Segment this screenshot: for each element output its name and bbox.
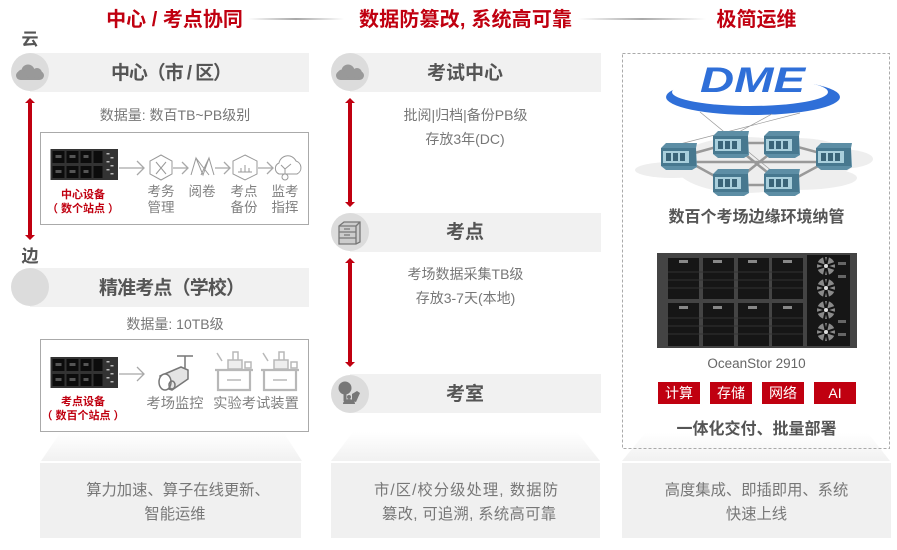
badge: AI: AI <box>828 385 842 401</box>
panel: precise exam site school: 精准考点（学校） <box>99 276 245 299</box>
badge: network <box>762 382 804 404</box>
panel: summary column 3: 快速上线 <box>726 506 787 523</box>
diagram: managed edge network <box>635 112 873 196</box>
panel: summary column 2 <box>331 463 600 538</box>
trapezoid decoration column 3 <box>622 433 890 461</box>
badge: compute: 计算 <box>665 385 693 401</box>
panel: classroom: 考室 <box>446 382 484 405</box>
text: managed edge environments: 数百个考场边缘环境纳管 <box>668 207 845 226</box>
arrow: server to camera <box>119 367 144 381</box>
text: center data volume: 数据量: 数百TB~PB级别 <box>100 107 250 123</box>
text: center equipment label: 中心设备 <box>61 187 105 201</box>
text: exam center details: 存放3年(DC) <box>425 131 505 147</box>
badge: storage <box>710 382 752 404</box>
panel: summary column 1: 智能运维 <box>144 505 206 523</box>
text: exam center details: 批阅|归档|备份PB级 <box>404 107 527 123</box>
title: center and exam site collaboration: 中心 / 考点协同 <box>106 8 243 31</box>
icon: DME logo: DME <box>700 61 807 100</box>
badge: AI <box>814 382 856 404</box>
icon: marking <box>191 158 214 175</box>
panel: exam center <box>331 53 601 92</box>
text: exam center details <box>404 107 527 147</box>
icon: storage cabinet <box>339 222 360 244</box>
text: school data volume: 数据量: 10TB级 <box>126 316 224 332</box>
panel: summary column 3: 高度集成、即插即用、系统 <box>665 482 848 499</box>
icon: lab exam device 2 <box>261 352 299 390</box>
text: monitoring command: 监考 <box>272 184 298 199</box>
badge: compute <box>658 382 700 404</box>
text: exam site equipment label: 考点设备 <box>61 394 105 408</box>
title: tamper proofing and high availability: 数据防篡改, 系统高可靠 <box>359 7 572 31</box>
label: edge: 边 <box>22 247 38 266</box>
text: lab exam device: 实验考试装置 <box>213 395 299 412</box>
panel: dashed simple operations box <box>622 54 890 448</box>
icon: camera and people <box>338 382 360 404</box>
text: exam site details: 存放3-7天(本地) <box>416 290 515 306</box>
panel: exam center: 考试中心 <box>427 62 503 84</box>
icon: exam management <box>150 155 172 180</box>
icon: exam site server <box>50 357 118 388</box>
text: exam site details <box>408 266 523 306</box>
panel: center equipment: 管理 <box>148 200 175 215</box>
text: OceanStor 2910: OceanStor 2910 <box>707 356 806 371</box>
panel: summary column 3 <box>622 463 891 538</box>
panel: summary column 1 <box>40 463 301 538</box>
panel: exam site: 考点 <box>446 221 484 243</box>
panel: exam site <box>331 213 601 252</box>
panel: center city and district <box>11 53 309 92</box>
panel: classroom <box>331 374 601 413</box>
panel: center equipment <box>40 132 308 224</box>
text: exam room monitoring: 考场监控 <box>146 395 204 412</box>
label: cloud: 云 <box>22 30 38 49</box>
arrow: server to exam management <box>119 161 144 175</box>
arrow: exam center to exam site <box>345 98 355 207</box>
panel: exam site equipment: （ 数百个站点 ） <box>41 408 125 422</box>
image: OceanStor 2910 server <box>657 253 857 348</box>
panel: center equipment: （ 数个站点 ） <box>47 201 119 215</box>
icon: exam site backup <box>233 155 257 180</box>
badge: network: 网络 <box>769 385 797 401</box>
text: exam site backup: 考点 <box>230 184 258 199</box>
panel: summary column 1: 算力加速、算子在线更新、 <box>86 481 270 499</box>
icon: center server <box>50 149 118 180</box>
title: simple operations: 极简运维 <box>716 8 796 31</box>
arrow: cloud to edge <box>25 98 35 240</box>
panel: center equipment: 指挥 <box>272 200 298 215</box>
text: exam management: 考务 <box>148 184 174 199</box>
trapezoid decoration column 2 <box>331 432 600 461</box>
panel: center equipment: 备份 <box>230 199 258 215</box>
text: marking: 阅卷 <box>188 184 216 199</box>
text: integrated delivery: 一体化交付、批量部署 <box>676 419 837 438</box>
trapezoid decoration column 1 <box>41 433 302 461</box>
icon: monitoring command <box>275 156 301 180</box>
badge: storage: 存储 <box>717 385 745 401</box>
panel: center city and district: 中心（市 / 区） <box>111 61 232 84</box>
panel: summary column 2: 市/区/校分级处理, 数据防 <box>374 482 558 499</box>
icon: DME logo <box>666 60 840 115</box>
panel: precise exam site school <box>11 268 309 307</box>
icon: surveillance camera <box>159 356 193 390</box>
arrow: exam site to classroom <box>345 258 355 367</box>
icon: lab exam device 1 <box>215 352 253 390</box>
panel: summary column 2: 篡改, 可追溯, 系统高可靠 <box>382 506 556 523</box>
text: exam site details: 考场数据采集TB级 <box>408 266 523 282</box>
panel: exam site equipment <box>40 340 308 432</box>
